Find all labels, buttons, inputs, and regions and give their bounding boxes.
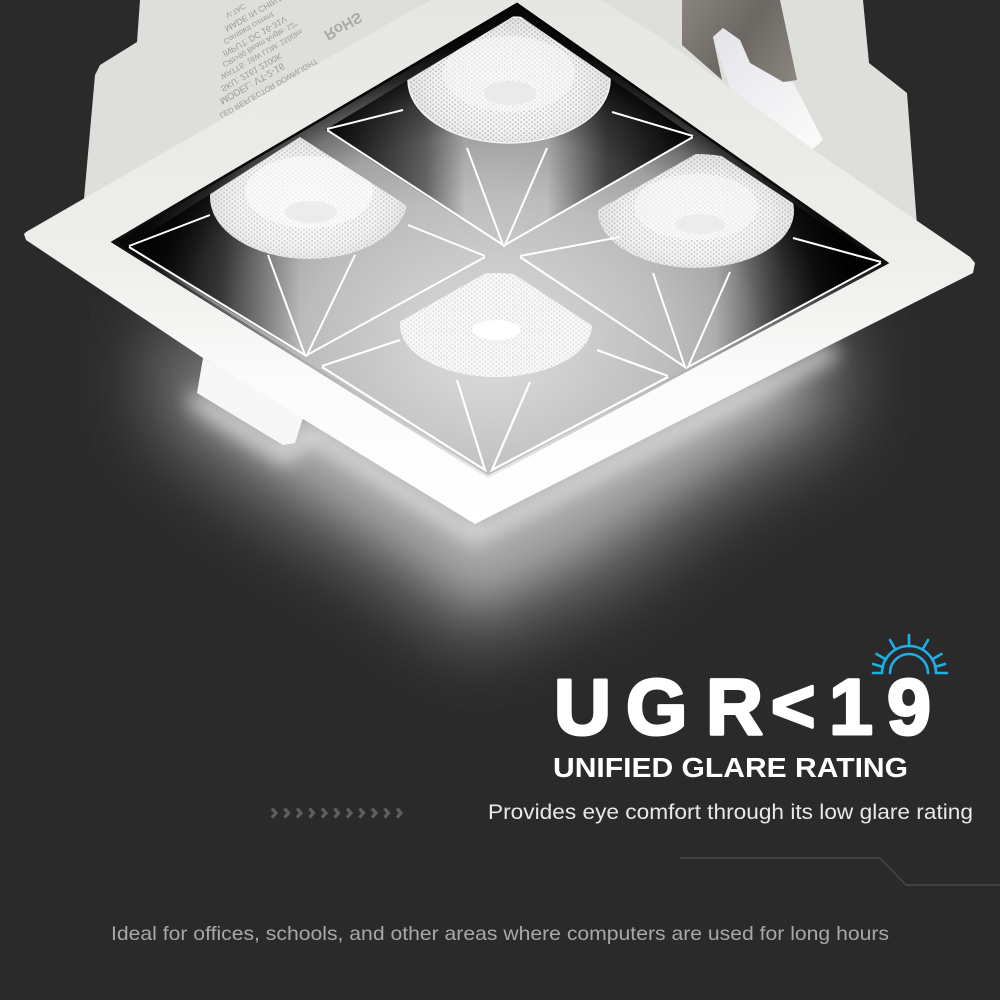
metal spring clip <box>682 0 797 82</box>
heading: UGR<19: U <box>554 662 611 751</box>
icon: sun glare <box>873 635 947 673</box>
subheading: unified glare rating: UNIFIED GLARE RATING <box>553 752 908 783</box>
housing: left side with printed label <box>83 0 430 210</box>
description: eye comfort: Provides eye comfort through its low glare rating <box>488 801 973 824</box>
white clip tab, top right <box>713 28 823 153</box>
heading: UGR<19: R <box>706 662 763 751</box>
bottom reflector cell <box>320 265 670 473</box>
downlight fixture <box>24 0 975 524</box>
chevron row <box>272 808 401 818</box>
printed product label: LED REFLECTOR DOWNLIGHT <box>218 57 319 120</box>
heading: UGR<19: < <box>771 664 815 749</box>
footer note: Ideal for offices, schools, and other areas where computers are used for long hours <box>111 923 889 945</box>
heading: UGR<19: 1 <box>829 662 873 751</box>
top lens <box>408 17 610 143</box>
decorative connector line <box>680 858 1000 885</box>
left reflector cell <box>127 135 487 357</box>
top reflector ridges <box>327 110 693 245</box>
bottom lens <box>400 273 592 377</box>
printed product label: V-TAC <box>224 1 248 20</box>
recessed opening <box>113 4 887 477</box>
bottom reflector ridges <box>322 340 668 470</box>
printed product label: MODEL: VT-2-16 <box>218 60 286 106</box>
right reflector cell <box>517 147 883 368</box>
printed product label: WATTS: 16W LUM: 1550lm <box>219 27 304 81</box>
top reflector cell <box>325 14 695 247</box>
left reflector ridges <box>129 215 485 355</box>
printed product label: RoHS <box>321 8 365 43</box>
printed product label: SKU: 2161 2100K <box>219 51 284 94</box>
printed product label: INPUT: DC 16-31V <box>221 14 289 59</box>
heading: UGR<19: 9 <box>887 662 931 751</box>
frame <box>24 0 975 524</box>
heading: UGR<19: G <box>626 662 687 751</box>
left lens <box>210 135 408 259</box>
printed product label: CRI>90 Beam Angle: 12° <box>221 19 299 69</box>
heading: UGR<19 <box>554 662 931 751</box>
housing: right side <box>600 0 917 260</box>
right reflector ridges <box>520 237 881 367</box>
light glow beneath the fixture <box>150 300 850 650</box>
printed product label: Constant current <box>222 10 276 46</box>
white clip tab, bottom left <box>197 358 303 445</box>
right lens <box>598 154 794 268</box>
printed product label <box>218 0 365 120</box>
